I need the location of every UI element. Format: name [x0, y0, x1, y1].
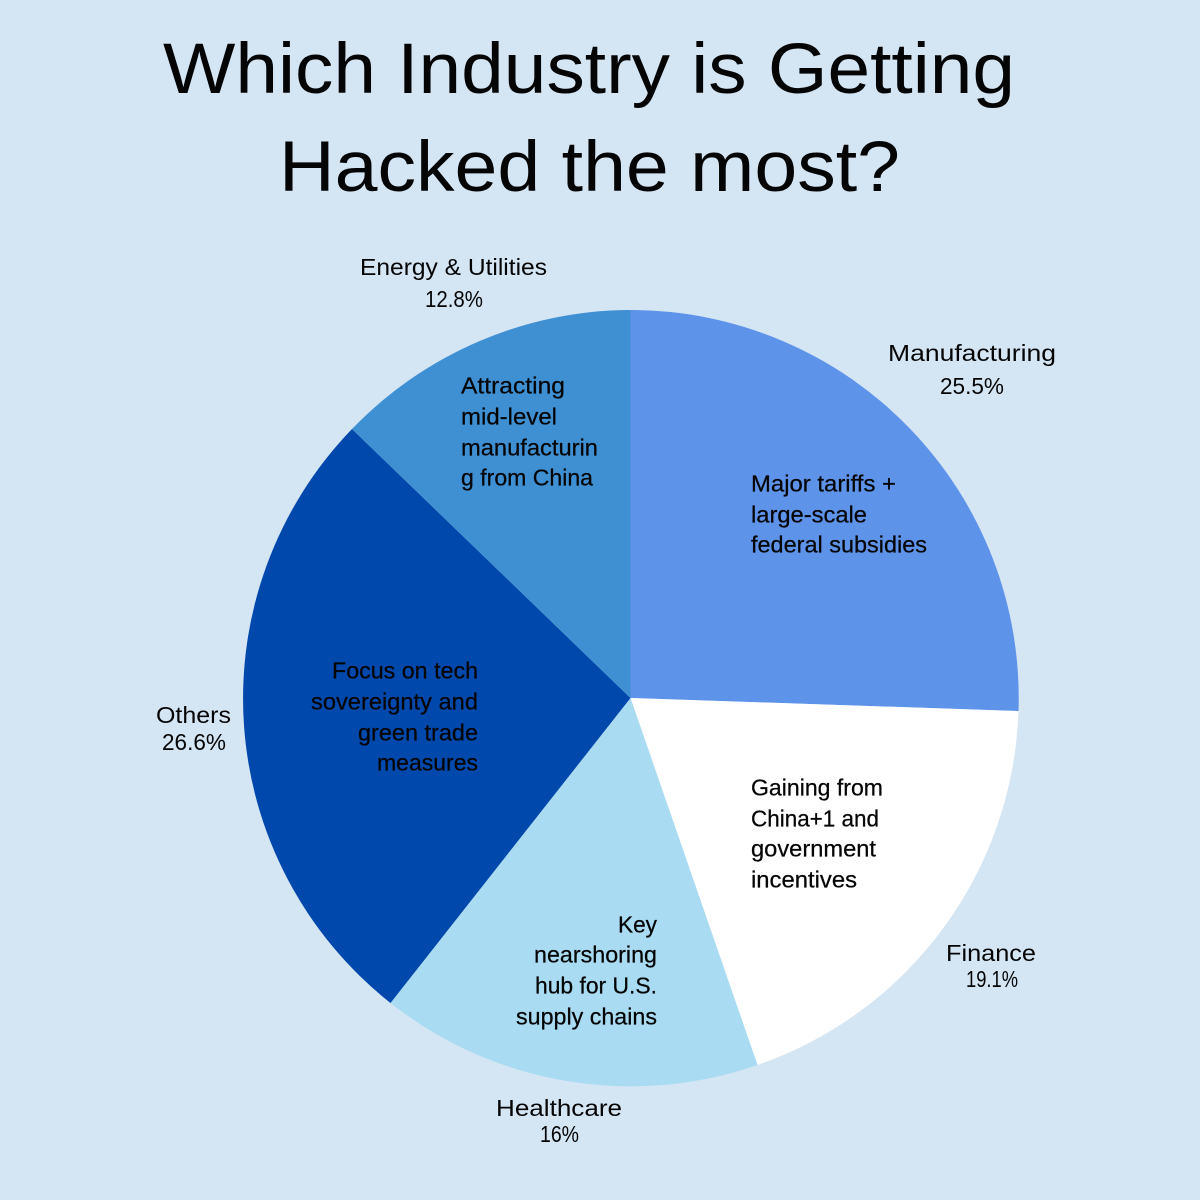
slice: Finance	[630, 698, 1018, 1065]
pie chart	[243, 310, 1019, 1086]
text: Energy & Utilities note: manufacturin	[461, 434, 598, 460]
label: Finance: 19.1%	[966, 966, 1018, 992]
label: Healthcare	[496, 1095, 622, 1147]
text: Finance note: Gaining from	[751, 774, 883, 800]
text: Healthcare note: Key	[618, 912, 657, 938]
slice: Manufacturing	[630, 310, 1019, 711]
slice: Healthcare	[390, 698, 758, 1086]
text: Others note: measures	[377, 750, 478, 776]
text: Finance note: China+1 and	[751, 806, 879, 832]
label: Others	[156, 702, 231, 755]
label: Finance	[946, 940, 1036, 992]
title: Hacked the most?	[279, 128, 900, 207]
title: Which Industry is Getting	[163, 30, 1015, 109]
label: Others: Others	[156, 702, 231, 728]
text: Energy & Utilities note: g from China	[461, 464, 594, 490]
slice: Others	[243, 429, 630, 1003]
label: Energy & Utilities: Energy & Utilities	[360, 254, 547, 280]
text: Others note: green trade	[358, 720, 478, 746]
text: Finance note: government	[751, 836, 876, 862]
label: Energy & Utilities	[360, 254, 547, 312]
label: Finance: Finance	[946, 940, 1036, 966]
label: Healthcare: Healthcare	[496, 1095, 622, 1121]
text: Energy & Utilities note: mid-level	[461, 404, 557, 430]
text: Healthcare note: nearshoring	[534, 942, 657, 968]
text: Finance note	[751, 774, 883, 892]
text: Others note: sovereignty and	[311, 688, 478, 714]
label: Energy & Utilities: 12.8%	[425, 286, 483, 312]
slice: Energy & Utilities	[352, 310, 630, 698]
label: Manufacturing: 25.5%	[940, 373, 1004, 399]
title	[163, 30, 1015, 207]
text: Healthcare note	[516, 912, 657, 1030]
text: Manufacturing note: large-scale	[751, 502, 867, 528]
label: Healthcare: 16%	[540, 1121, 579, 1147]
text: Others note: Focus on tech	[332, 658, 478, 684]
text: Healthcare note: supply chains	[516, 1004, 657, 1030]
label: Others: 26.6%	[162, 729, 226, 755]
text: Manufacturing note: federal subsidies	[751, 532, 927, 558]
text: Healthcare note: hub for U.S.	[535, 972, 657, 998]
text: Manufacturing note: Major tariffs +	[751, 470, 896, 496]
text: Finance note: incentives	[751, 866, 857, 892]
text: Energy & Utilities note: Attracting	[461, 372, 565, 398]
text: Manufacturing note	[751, 470, 927, 558]
text: Others note	[311, 658, 478, 776]
text: Energy & Utilities note	[461, 372, 598, 490]
label: Manufacturing: Manufacturing	[888, 340, 1056, 366]
label: Manufacturing	[888, 340, 1056, 399]
